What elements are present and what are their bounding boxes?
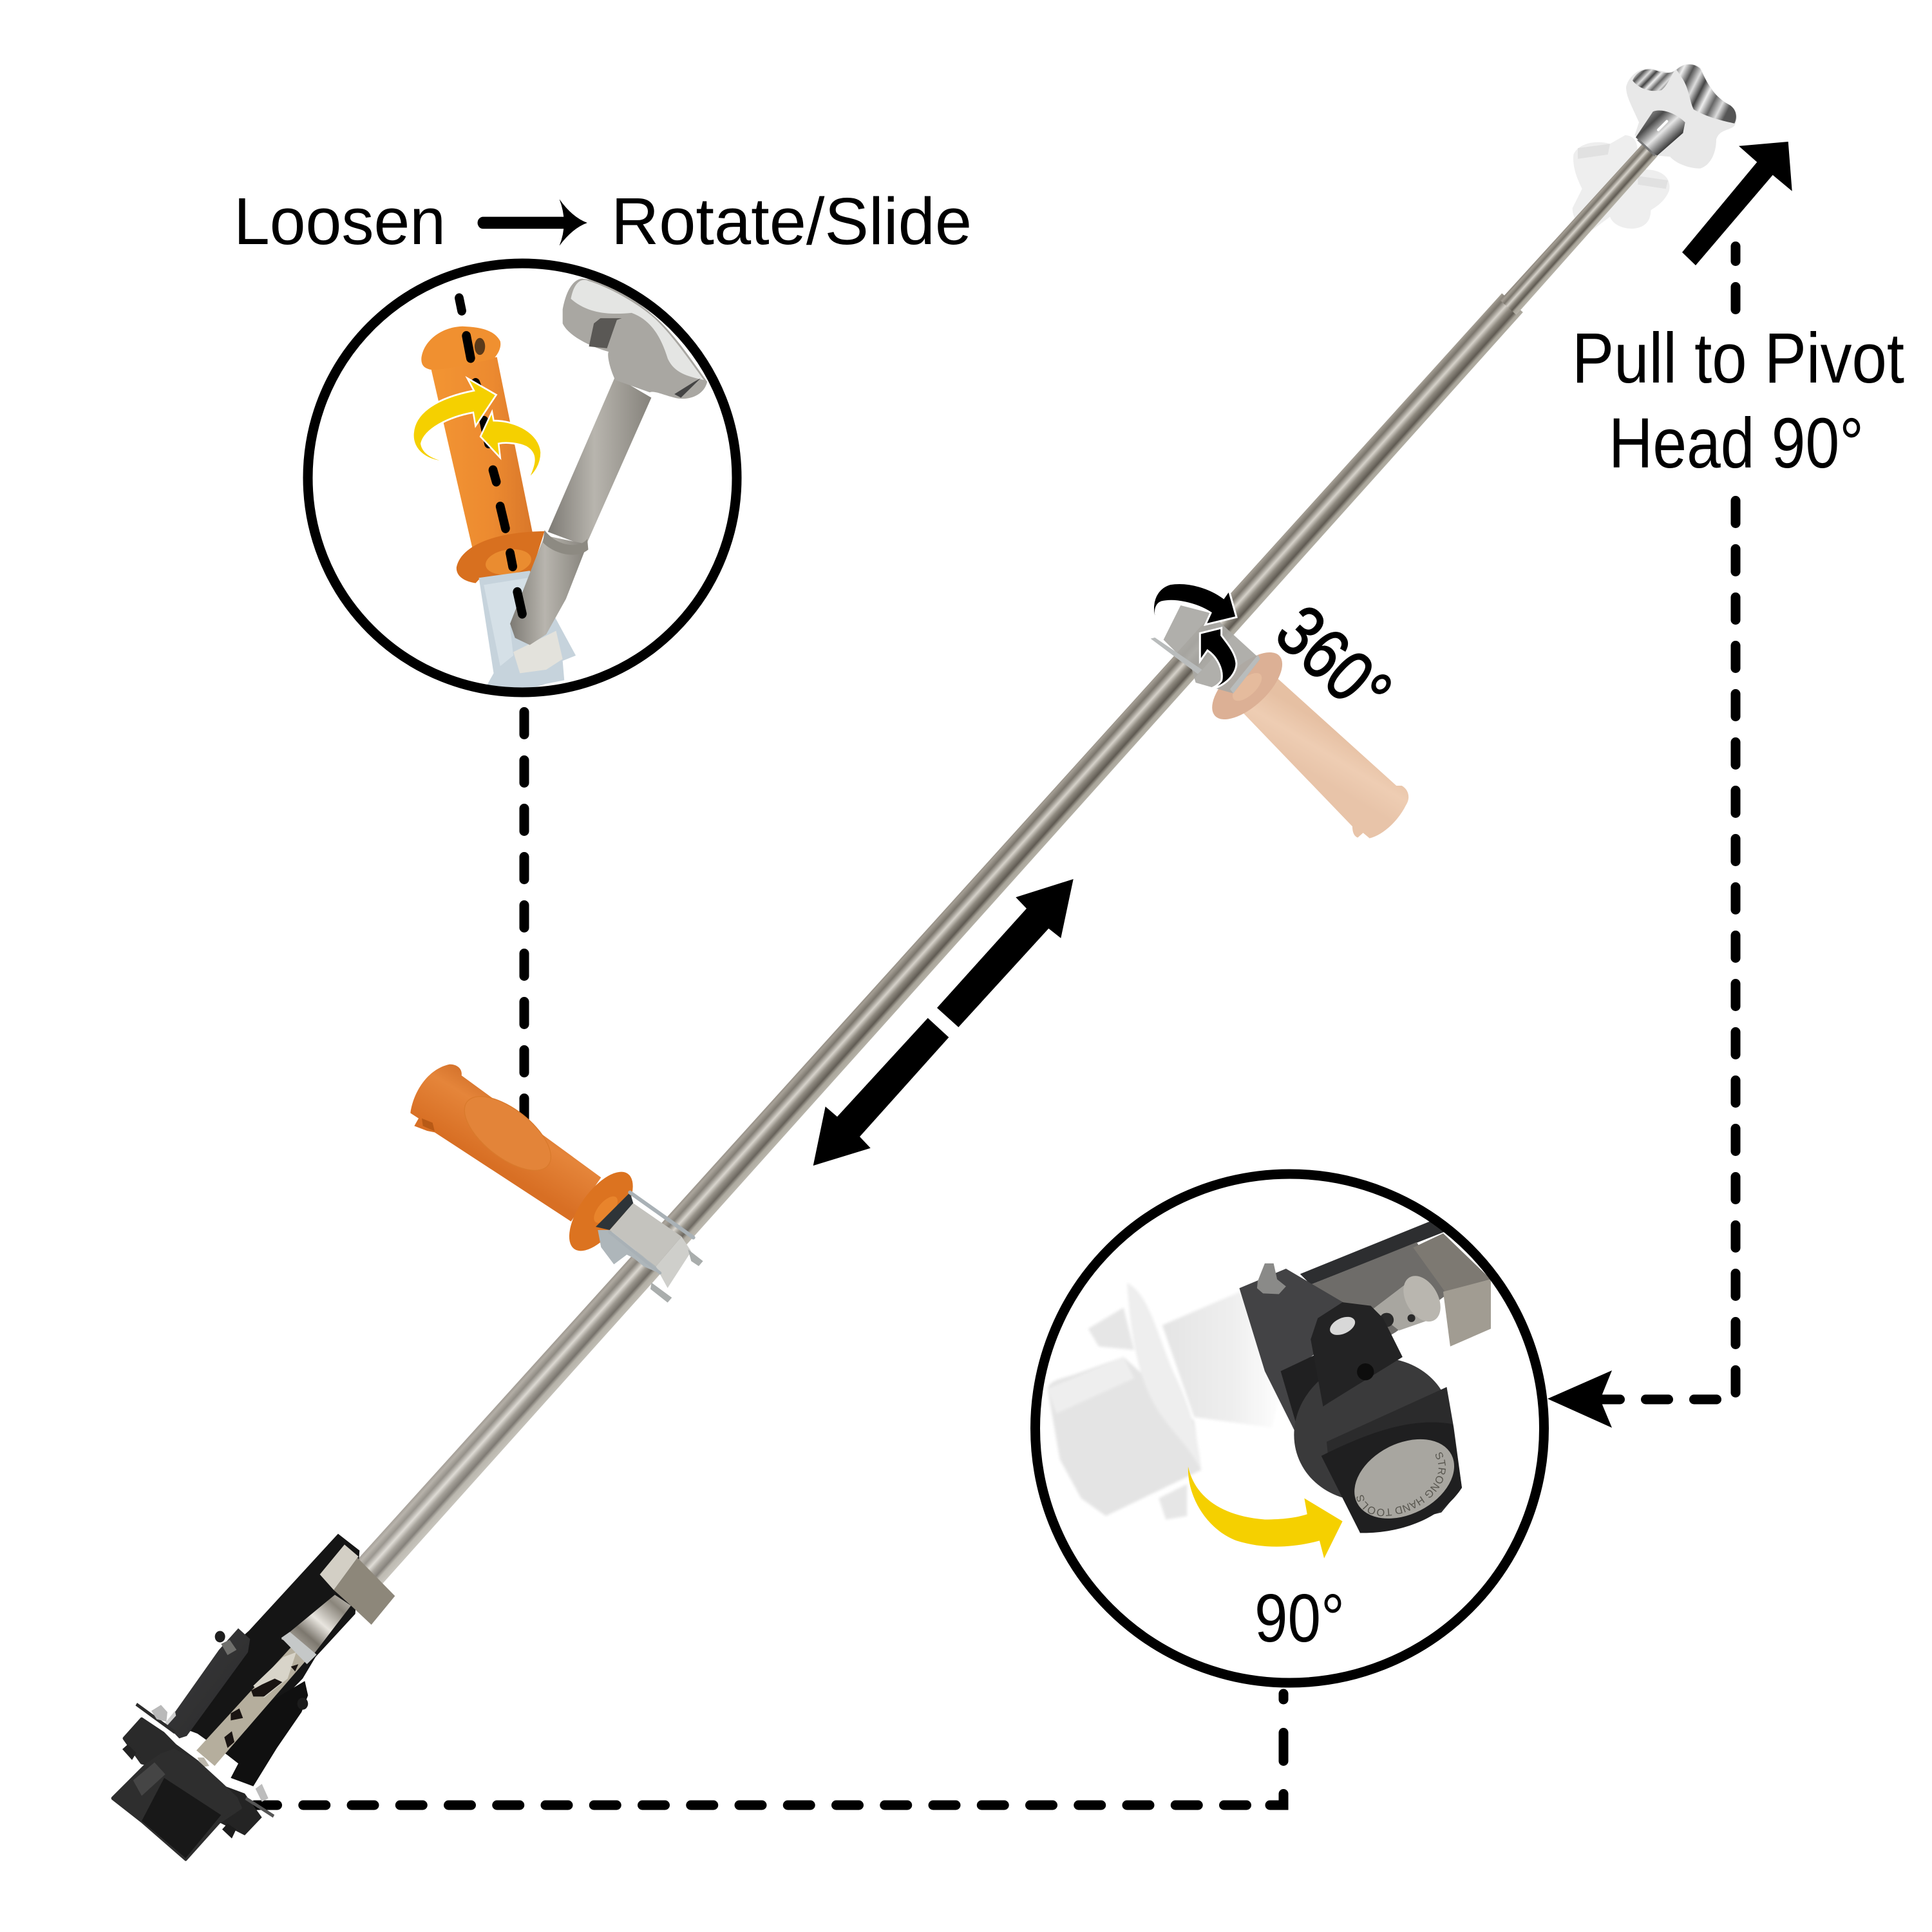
lower inset: head pivots 90 degrees [1030, 1170, 1549, 1687]
pull direction arrow [1682, 142, 1792, 265]
yellow rotation arrows [413, 378, 542, 479]
heading arrow: loosen to rotate [478, 199, 587, 246]
bottom pivot head assembly [113, 1534, 395, 1859]
heading: Rotate/Slide: Rotate/Slide [611, 184, 972, 258]
chrome top knob [1626, 64, 1737, 169]
ghost handle showing 360 degree rotation [1151, 583, 1408, 838]
arrowhead pointing at lower inset [1548, 1370, 1612, 1428]
upper inset: handle rotates and slides [308, 263, 737, 692]
callout: Pull to Pivot Head 90° [1572, 319, 1904, 483]
yellow pivot arrow [1188, 1466, 1343, 1558]
lower inset: head pivots 90 degrees: STRONG HAND TOOLS [1356, 1452, 1446, 1516]
heading: Loosen: Loosen [234, 184, 446, 258]
double-headed slide arrow [813, 879, 1074, 1166]
callout: Pull to Pivot Head 90°: Head 90° [1609, 404, 1864, 483]
label: 360°: 360° [1262, 590, 1406, 733]
dashed connector: bottom head to lower inset [255, 1694, 1283, 1805]
dashed connector: pull arrow to lower inset [1597, 246, 1736, 1399]
orange side handle with clamp [410, 1065, 703, 1303]
dashed connector: orange handle to upper inset [519, 712, 529, 1133]
label: 90°: 90° [1255, 1580, 1345, 1656]
alignment dashes over handle [459, 298, 522, 614]
main telescoping steel rod [355, 138, 1663, 1585]
ghost knob showing pulled position [1573, 135, 1670, 230]
